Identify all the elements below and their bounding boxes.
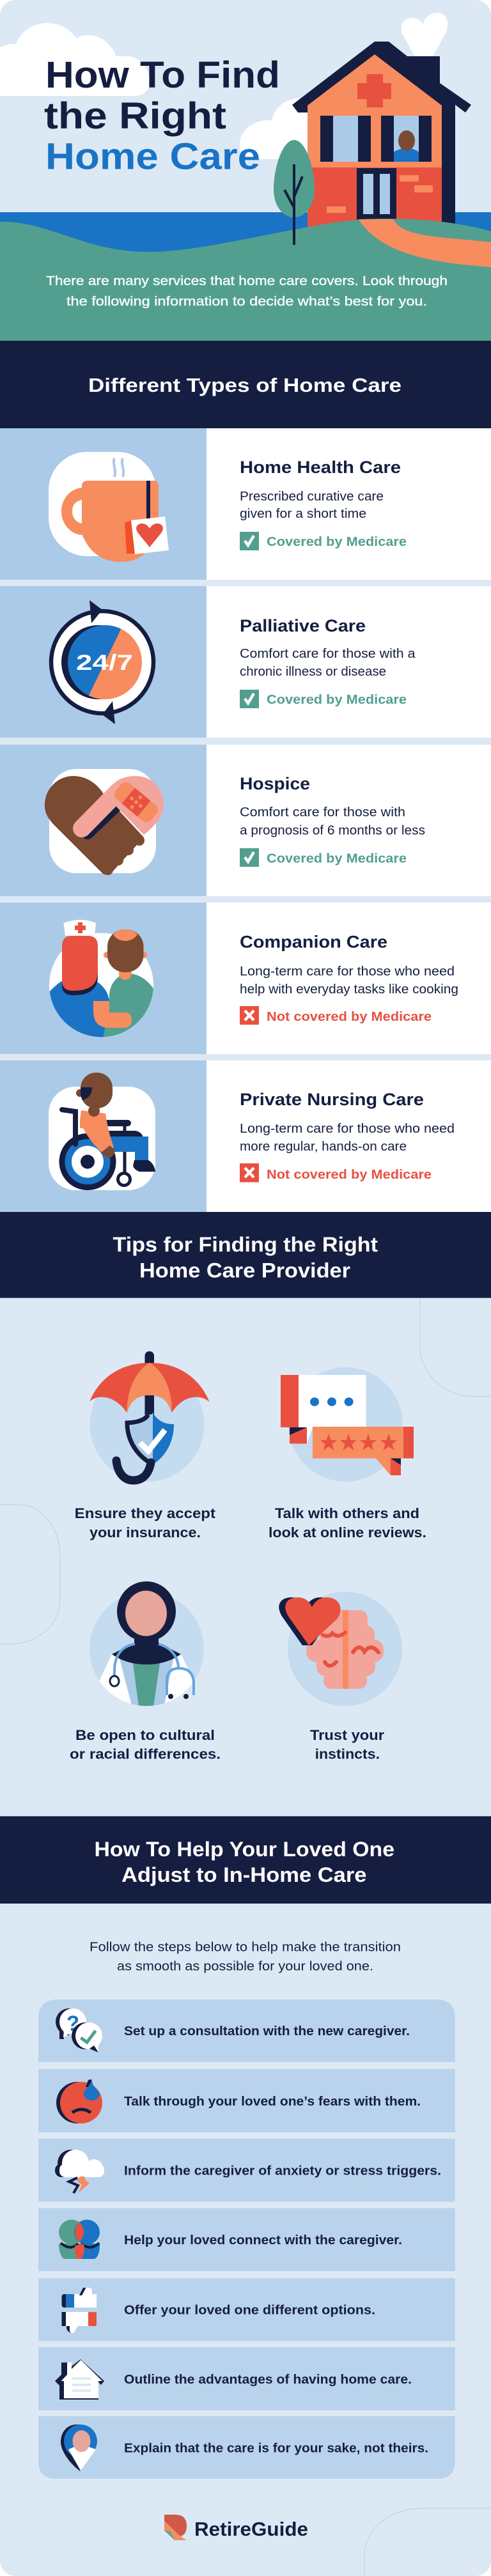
heading band: Tips — [0, 1212, 491, 1298]
icon: tea mug — [49, 452, 169, 562]
cloud right — [240, 98, 320, 159]
panel: Palliative Care — [0, 586, 491, 738]
text: Private Nursing Care: Long-term care for those who need — [240, 1122, 455, 1136]
text: Companion Care: Long-term care for those who need — [240, 965, 455, 979]
intro: follow the steps: as smooth as possible for your loved one. — [117, 1960, 373, 1974]
title — [44, 54, 280, 178]
status: covered — [240, 690, 407, 708]
step 5 — [38, 2278, 455, 2341]
text: Hospice: a prognosis of 6 months or less — [240, 823, 425, 837]
intro text: the following information to decide what’s best for you. — [66, 294, 427, 309]
step 5: Offer your loved one different options. — [124, 2304, 375, 2318]
step 3: Inform the caregiver of anxiety or stress triggers. — [124, 2164, 441, 2178]
cloud left — [0, 23, 150, 96]
text: Private Nursing Care — [240, 1090, 455, 1154]
heading band: Adjust: Adjust to In-Home Care — [121, 1863, 367, 1886]
text: Companion Care: Companion Care — [240, 932, 387, 951]
icon: nurse and patient — [49, 920, 153, 1037]
heading band: Different Types of Home Care: Different Types of Home Care — [88, 374, 401, 396]
title: the Right — [44, 95, 226, 137]
text: Home Health Care: Home Health Care — [240, 458, 401, 477]
door — [357, 168, 396, 221]
text: Palliative Care: Palliative Care — [240, 616, 366, 635]
status: covered: Covered by Medicare — [267, 851, 407, 865]
icon: map pin — [61, 2425, 97, 2471]
text: Hospice: Hospice — [240, 774, 310, 793]
heart smoke — [401, 13, 448, 59]
text: Hospice: Comfort care for those with — [240, 805, 405, 819]
icon: question and check bubbles — [56, 2008, 102, 2052]
house — [292, 42, 471, 227]
intro: follow the steps: Follow the steps below to help make the transition — [90, 1941, 401, 1955]
hill — [0, 219, 491, 341]
step 2: Talk through your loved one’s fears with them. — [124, 2095, 421, 2109]
caption: instincts. — [315, 1746, 380, 1762]
step 7 — [38, 2416, 455, 2479]
path — [359, 219, 491, 267]
water — [0, 212, 491, 256]
step 2 — [38, 2069, 455, 2132]
text: Hospice — [240, 774, 425, 837]
heading band: Adjust — [0, 1816, 491, 1904]
icon: house — [55, 2359, 104, 2400]
heading band: Adjust: How To Help Your Loved One — [95, 1838, 394, 1861]
caption — [269, 1505, 426, 1540]
status: not covered: Not covered by Medicare — [267, 1010, 432, 1024]
caption: Talk with others and — [275, 1505, 419, 1521]
caption — [310, 1727, 384, 1762]
left window — [320, 116, 371, 162]
status: covered: Covered by Medicare — [267, 693, 407, 707]
status: not covered — [240, 1006, 432, 1025]
intro text — [46, 274, 448, 309]
panel: Hospice — [0, 745, 491, 896]
right window with person — [381, 116, 432, 162]
step 3 — [38, 2139, 455, 2202]
text: Palliative Care: Comfort care for those with a — [240, 647, 416, 661]
step 6: Outline the advantages of having home care. — [124, 2373, 412, 2387]
caption — [70, 1727, 221, 1762]
text: Home Health Care: Prescribed curative care — [240, 490, 384, 504]
step 7: Explain that the care is for your sake, not theirs. — [124, 2442, 428, 2456]
status: covered — [240, 848, 407, 867]
status: not covered: Not covered by Medicare — [267, 1168, 432, 1182]
icon: storm cloud — [55, 2150, 104, 2193]
caption: Ensure they accept — [75, 1505, 216, 1521]
panel: Private Nursing Care — [0, 1060, 491, 1212]
status: covered — [240, 532, 407, 550]
text: Companion Care: help with everyday tasks like cooking — [240, 982, 458, 997]
logo: RetireGuide — [164, 2515, 308, 2540]
hero illustration — [0, 13, 491, 341]
icon: heart and brain — [279, 1592, 402, 1706]
tip: reviews — [269, 1367, 426, 1540]
text: Palliative Care — [240, 616, 416, 679]
caption: or racial differences. — [70, 1746, 221, 1762]
heading band: Tips: Tips for Finding the Right — [113, 1233, 378, 1256]
status: covered: Covered by Medicare — [267, 535, 407, 549]
step 6 — [38, 2347, 455, 2410]
intro text: There are many services that home care covers. Look through — [46, 274, 448, 288]
caption: Be open to cultural — [75, 1727, 215, 1743]
icon: 24/7 clock — [51, 600, 153, 724]
tree — [274, 140, 315, 245]
icon: wheelchair — [49, 1073, 155, 1190]
icon: thumbs up and down — [61, 2288, 97, 2333]
status: not covered — [240, 1163, 432, 1183]
text: Palliative Care: chronic illness or disease — [240, 665, 386, 679]
caption: look at online reviews. — [269, 1525, 426, 1540]
intro: follow the steps — [90, 1941, 401, 1974]
bricks — [327, 175, 433, 213]
text: Home Health Care: given for a short time — [240, 507, 366, 521]
text: Private Nursing Care: Private Nursing Care — [240, 1090, 424, 1109]
title: Home Care — [45, 136, 260, 178]
text: Home Health Care — [240, 458, 401, 521]
icon: heart handshake — [45, 769, 164, 875]
icon: 24/7 clock: 24/7 — [76, 651, 133, 675]
logo: RetireGuide: RetireGuide — [194, 2518, 308, 2540]
icon: two people — [59, 2219, 100, 2259]
icon: question and check bubbles: ? — [66, 2012, 79, 2036]
caption: your insurance. — [90, 1525, 201, 1540]
caption: Trust your — [310, 1727, 384, 1743]
icon: worried face — [56, 2079, 102, 2123]
caption — [75, 1505, 216, 1540]
panel: Companion Care — [0, 903, 491, 1054]
text: Companion Care — [240, 932, 458, 997]
logo mark — [164, 2515, 187, 2540]
icon: speech bubbles — [281, 1367, 414, 1482]
icon: umbrella with shield — [90, 1351, 210, 1482]
step 1 — [38, 1999, 455, 2062]
text: Private Nursing Care: more regular, hands-on care — [240, 1140, 407, 1154]
panel: Home Health Care — [0, 428, 491, 580]
tip: trust instincts — [279, 1592, 402, 1762]
step 1: Set up a consultation with the new caregiver. — [124, 2024, 410, 2038]
step 4: Help your loved connect with the caregiver. — [124, 2233, 402, 2247]
heading band: Different Types of Home Care — [0, 341, 491, 428]
icon: doctor — [86, 1581, 208, 1708]
tip: insurance — [75, 1351, 216, 1540]
tip: cultural differences — [70, 1581, 221, 1762]
step 4 — [38, 2208, 455, 2271]
heading band: Tips: Home Care Provider — [139, 1259, 350, 1282]
title: How To Find — [45, 54, 280, 96]
